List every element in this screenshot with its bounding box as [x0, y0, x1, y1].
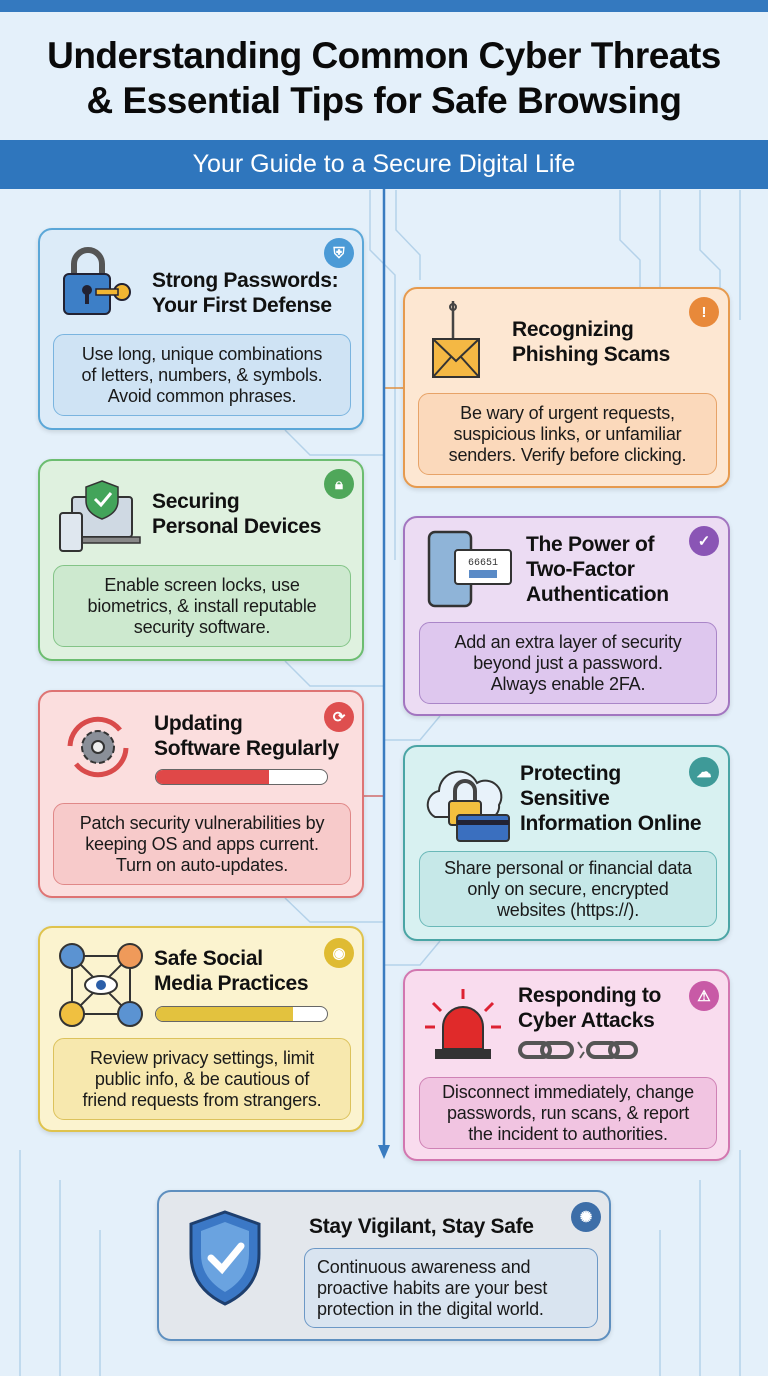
- text block: [419, 622, 717, 704]
- heading: [152, 490, 321, 538]
- icon badge: eye: [324, 938, 354, 968]
- heading: [520, 762, 701, 835]
- icon badge: cloud lock: ☁: [696, 764, 712, 781]
- text block: biometrics, & install reputable: [88, 596, 316, 616]
- text block: Continuous awareness and: [317, 1256, 530, 1276]
- panel: updating software: [38, 690, 364, 898]
- icon badge: shield: [324, 238, 354, 268]
- panel: securing devices: [38, 459, 364, 661]
- icon: alarm siren: [425, 989, 501, 1059]
- subtitle band: [0, 140, 768, 189]
- text block: Avoid common phrases.: [108, 386, 296, 406]
- heading: Software Regularly: [154, 737, 339, 760]
- text block: protection in the digital world.: [317, 1298, 544, 1318]
- heading: [518, 984, 661, 1032]
- progress bar: [155, 769, 328, 785]
- panel: responding to attacks: [403, 969, 730, 1161]
- icon badge: eye: ◉: [332, 945, 346, 962]
- title: Understanding Common Cyber Threats: [47, 35, 721, 76]
- central timeline arrow: [378, 189, 390, 1159]
- icon: phone with code: [428, 530, 512, 608]
- heading: Information Online: [520, 812, 701, 835]
- icon: broken chain: [518, 1041, 638, 1059]
- heading: [154, 712, 339, 760]
- icon badge: brain: ✺: [580, 1209, 592, 1226]
- heading: Stay Vigilant, Stay Safe: [309, 1215, 534, 1238]
- text block: [419, 1077, 717, 1149]
- icon badge: brain: [571, 1202, 601, 1232]
- icon: devices with shield: [59, 480, 141, 552]
- text block: beyond just a password.: [473, 652, 663, 672]
- heading: Cyber Attacks: [518, 1009, 655, 1032]
- text block: Add an extra layer of security: [454, 632, 682, 652]
- subtitle band: Your Guide to a Secure Digital Life: [193, 150, 575, 178]
- top bar: [0, 0, 768, 12]
- text block: [53, 334, 351, 416]
- panel: social media: [38, 926, 364, 1132]
- heading: Two-Factor: [526, 558, 635, 581]
- icon badge: warning: !: [702, 304, 706, 320]
- text block: [304, 1248, 598, 1328]
- heading: Safe Social: [154, 947, 263, 970]
- heading: Updating: [154, 712, 243, 735]
- text block: public info, & be cautious of: [95, 1068, 309, 1088]
- text block: security software.: [134, 616, 270, 636]
- icon badge: lock: [324, 469, 354, 499]
- text block: proactive habits are your best: [317, 1278, 547, 1298]
- heading: Personal Devices: [152, 515, 321, 538]
- icon badge: siren: ⚠: [697, 988, 711, 1005]
- text block: only on secure, encrypted: [467, 878, 669, 898]
- heading: Your First Defense: [152, 294, 332, 317]
- heading: Strong Passwords:: [152, 269, 338, 292]
- heading: Sensitive: [520, 787, 610, 810]
- slider bar: [155, 1006, 328, 1022]
- icon: cloud, lock, card: [426, 770, 510, 842]
- heading: Recognizing: [512, 318, 634, 341]
- title: & Essential Tips for Safe Browsing: [86, 80, 682, 121]
- icon badge: refresh: [324, 702, 354, 732]
- panel: phishing: [403, 287, 730, 488]
- icon: network with eye: [59, 943, 143, 1027]
- icon: gear with arrows: [68, 716, 128, 778]
- text block: [418, 393, 717, 475]
- text block: [53, 803, 351, 885]
- text block: friend requests from strangers.: [83, 1090, 321, 1110]
- title: [47, 35, 721, 121]
- heading: [512, 318, 670, 366]
- text block: Enable screen locks, use: [104, 574, 300, 594]
- heading: [526, 533, 669, 606]
- icon: phone with code: 66651: [468, 558, 498, 569]
- icon: envelope with hook: [432, 301, 480, 378]
- icon: padlock with key: [63, 247, 131, 315]
- icon badge: refresh: ⟳: [333, 709, 345, 726]
- text block: websites (https://).: [497, 900, 639, 920]
- heading: The Power of: [526, 533, 654, 556]
- heading: Protecting: [520, 762, 621, 785]
- icon badge: siren: [689, 981, 719, 1011]
- icon badge: checks: ✓: [698, 533, 710, 550]
- icon badge: cloud lock: [689, 757, 719, 787]
- icon badge: warning: [689, 297, 719, 327]
- text block: Always enable 2FA.: [491, 674, 645, 694]
- icon badge: lock: 🔒︎: [335, 476, 343, 492]
- panel: two-factor: [403, 516, 730, 716]
- text block: [53, 1038, 351, 1120]
- text block: the incident to authorities.: [468, 1124, 668, 1144]
- text block: Use long, unique combinations: [82, 344, 322, 364]
- heading: [152, 269, 338, 317]
- text block: Be wary of urgent requests,: [460, 402, 675, 422]
- text block: of letters, numbers, & symbols.: [82, 364, 322, 384]
- panel: stay vigilant: [157, 1190, 611, 1341]
- text block: senders. Verify before clicking.: [449, 444, 686, 464]
- heading: Media Practices: [154, 972, 308, 995]
- heading: [154, 947, 308, 995]
- heading: Authentication: [526, 583, 669, 606]
- text block: keeping OS and apps current.: [85, 834, 319, 854]
- icon: shield check: [190, 1210, 260, 1306]
- icon badge: checks: [689, 526, 719, 556]
- icon badge: shield: ⛨: [333, 244, 345, 262]
- panel: protecting info: [403, 745, 730, 941]
- text block: Turn on auto-updates.: [116, 854, 288, 874]
- text block: [53, 565, 351, 647]
- heading: Securing: [152, 490, 239, 513]
- text block: Review privacy settings, limit: [90, 1048, 314, 1068]
- text block: Disconnect immediately, change: [442, 1082, 694, 1102]
- text block: passwords, run scans, & report: [447, 1102, 689, 1122]
- text block: suspicious links, or unfamiliar: [454, 424, 681, 444]
- heading: Phishing Scams: [512, 343, 670, 366]
- heading: Responding to: [518, 984, 661, 1007]
- text block: Patch security vulnerabilities by: [80, 812, 324, 832]
- panel: strong passwords: [38, 228, 364, 430]
- text block: [419, 851, 717, 927]
- text block: Share personal or financial data: [444, 858, 692, 878]
